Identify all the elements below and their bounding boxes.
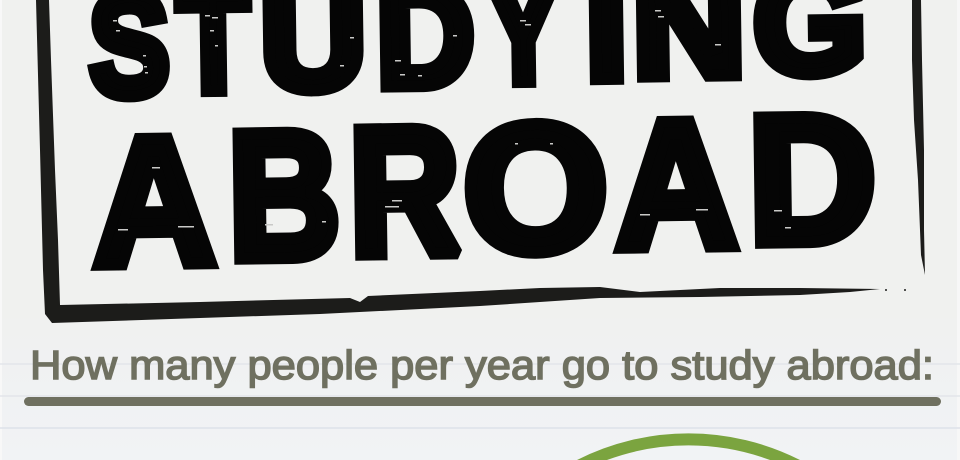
title line: ABROAD: R xyxy=(348,88,462,294)
title line: ABROAD: D xyxy=(747,76,878,282)
title line: ABROAD: A xyxy=(614,81,739,287)
title line: ABROAD xyxy=(92,76,878,304)
heading rule xyxy=(24,397,941,406)
title line: STUDYING xyxy=(88,0,867,127)
title line: ABROAD: A xyxy=(92,98,217,304)
title: STUDYING ABROAD xyxy=(88,0,878,304)
title line: ABROAD: B xyxy=(227,92,342,298)
title frame: rough hand-drawn box xyxy=(36,0,925,323)
title line: ABROAD: O xyxy=(462,85,610,291)
heading: how many people: How many people per year go to study abroad: xyxy=(30,342,934,388)
green circle (cropped at the bottom edge) xyxy=(577,433,800,460)
